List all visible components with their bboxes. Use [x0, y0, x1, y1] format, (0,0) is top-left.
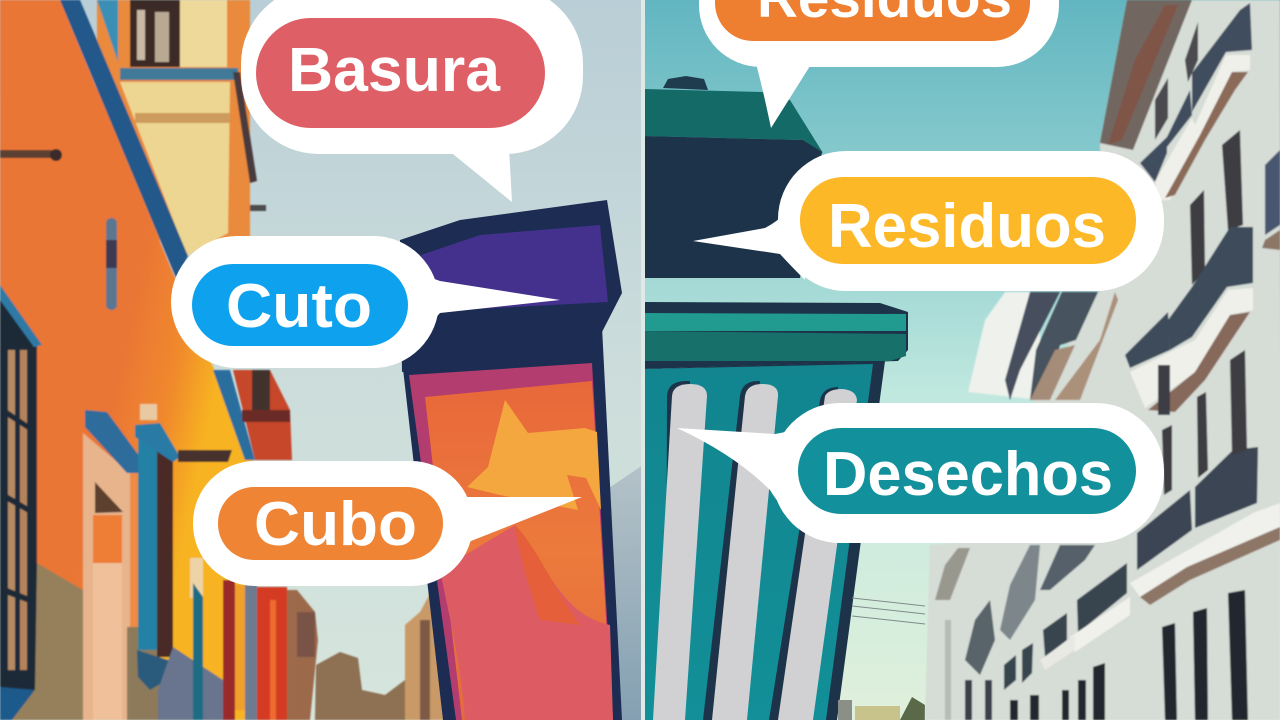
street wires — [852, 598, 925, 624]
callout: Cuto — [171, 236, 560, 368]
callout: Residuos top — [699, 0, 1059, 128]
far right skyline — [838, 697, 925, 720]
callout: Desechos — [677, 403, 1164, 543]
panel: right sky — [644, 0, 1280, 720]
icon: right trash bin — [644, 76, 908, 720]
panel: left colonial street — [0, 0, 318, 720]
icon: left trash bin — [400, 200, 622, 720]
callout: Cubo: Cubo — [254, 490, 417, 559]
callout: Basura: Basura — [288, 36, 501, 105]
callout: Cuto: Cuto — [226, 272, 372, 341]
callout: Cubo — [193, 461, 582, 586]
callout: Residuos middle: Residuos — [828, 192, 1106, 261]
panel: left sky — [0, 0, 643, 720]
callout: Desechos: Desechos — [823, 440, 1113, 509]
far buildings at street end — [315, 585, 450, 720]
callout: Residuos middle — [693, 151, 1164, 291]
panel divider — [641, 0, 645, 720]
callout: Basura — [241, 0, 583, 202]
panel: right white building — [925, 0, 1280, 720]
mountain behind left bin — [606, 465, 643, 720]
